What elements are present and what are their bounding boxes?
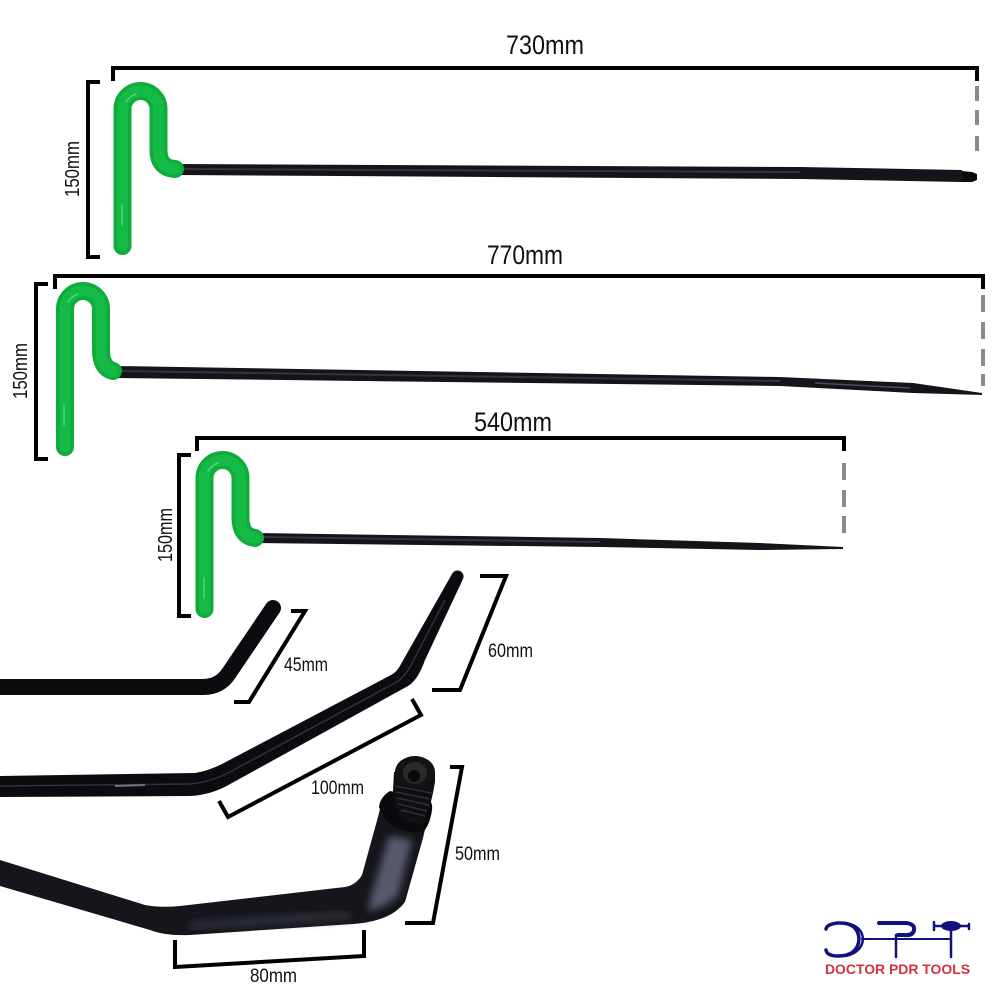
dimension: 60mm: 60mm: [488, 641, 533, 662]
rod tip detail: 45mm: [0, 608, 273, 695]
dimension: 100mm: [219, 699, 421, 817]
rod 1: 730mm: [122, 91, 977, 246]
rod body: [0, 805, 430, 935]
threaded rod end detail: 50mm and 80mm: [0, 756, 435, 935]
thread: [393, 772, 435, 824]
rod 3: 540mm: [204, 460, 843, 609]
dimension: 150mm rod 2: [10, 284, 48, 459]
dimension: 540mm: 540mm: [474, 407, 552, 437]
dimension: 60mm: [432, 576, 533, 690]
bore: [395, 756, 435, 788]
bend highlight: [368, 836, 412, 911]
rod tip detail: 60mm and 100mm: [0, 570, 464, 797]
dimension: 150mm rod 3: 150mm: [155, 508, 177, 562]
dimension: 80mm: 80mm: [250, 966, 297, 987]
logo wordmark: DOCTOR PDR TOOLS: [825, 961, 970, 977]
logo icon: [826, 921, 969, 957]
logo: Doctor PDR Tools: [825, 921, 970, 977]
dimension: 150mm rod 2: 150mm: [10, 343, 32, 399]
rod 2: 770mm: [64, 291, 982, 447]
dimension: 150mm rod 1: [62, 82, 100, 257]
dimension: 150mm rod 3: [155, 455, 191, 616]
dimension: 50mm: 50mm: [455, 844, 500, 865]
dimension: 150mm rod 1: 150mm: [62, 141, 84, 197]
dimension: 80mm: [175, 930, 364, 987]
dimension: 45mm: 45mm: [284, 655, 328, 676]
dimension: 50mm: [405, 767, 500, 923]
collar: [379, 791, 432, 832]
dimension: 730mm: [113, 30, 977, 151]
dimension: 770mm: 770mm: [487, 240, 563, 270]
dimension: 770mm: [55, 240, 983, 386]
dimension: 100mm: 100mm: [311, 778, 364, 799]
dimension: 45mm: [234, 611, 328, 702]
dimension: 540mm: [197, 407, 844, 533]
dimension: 730mm: 730mm: [506, 30, 584, 60]
